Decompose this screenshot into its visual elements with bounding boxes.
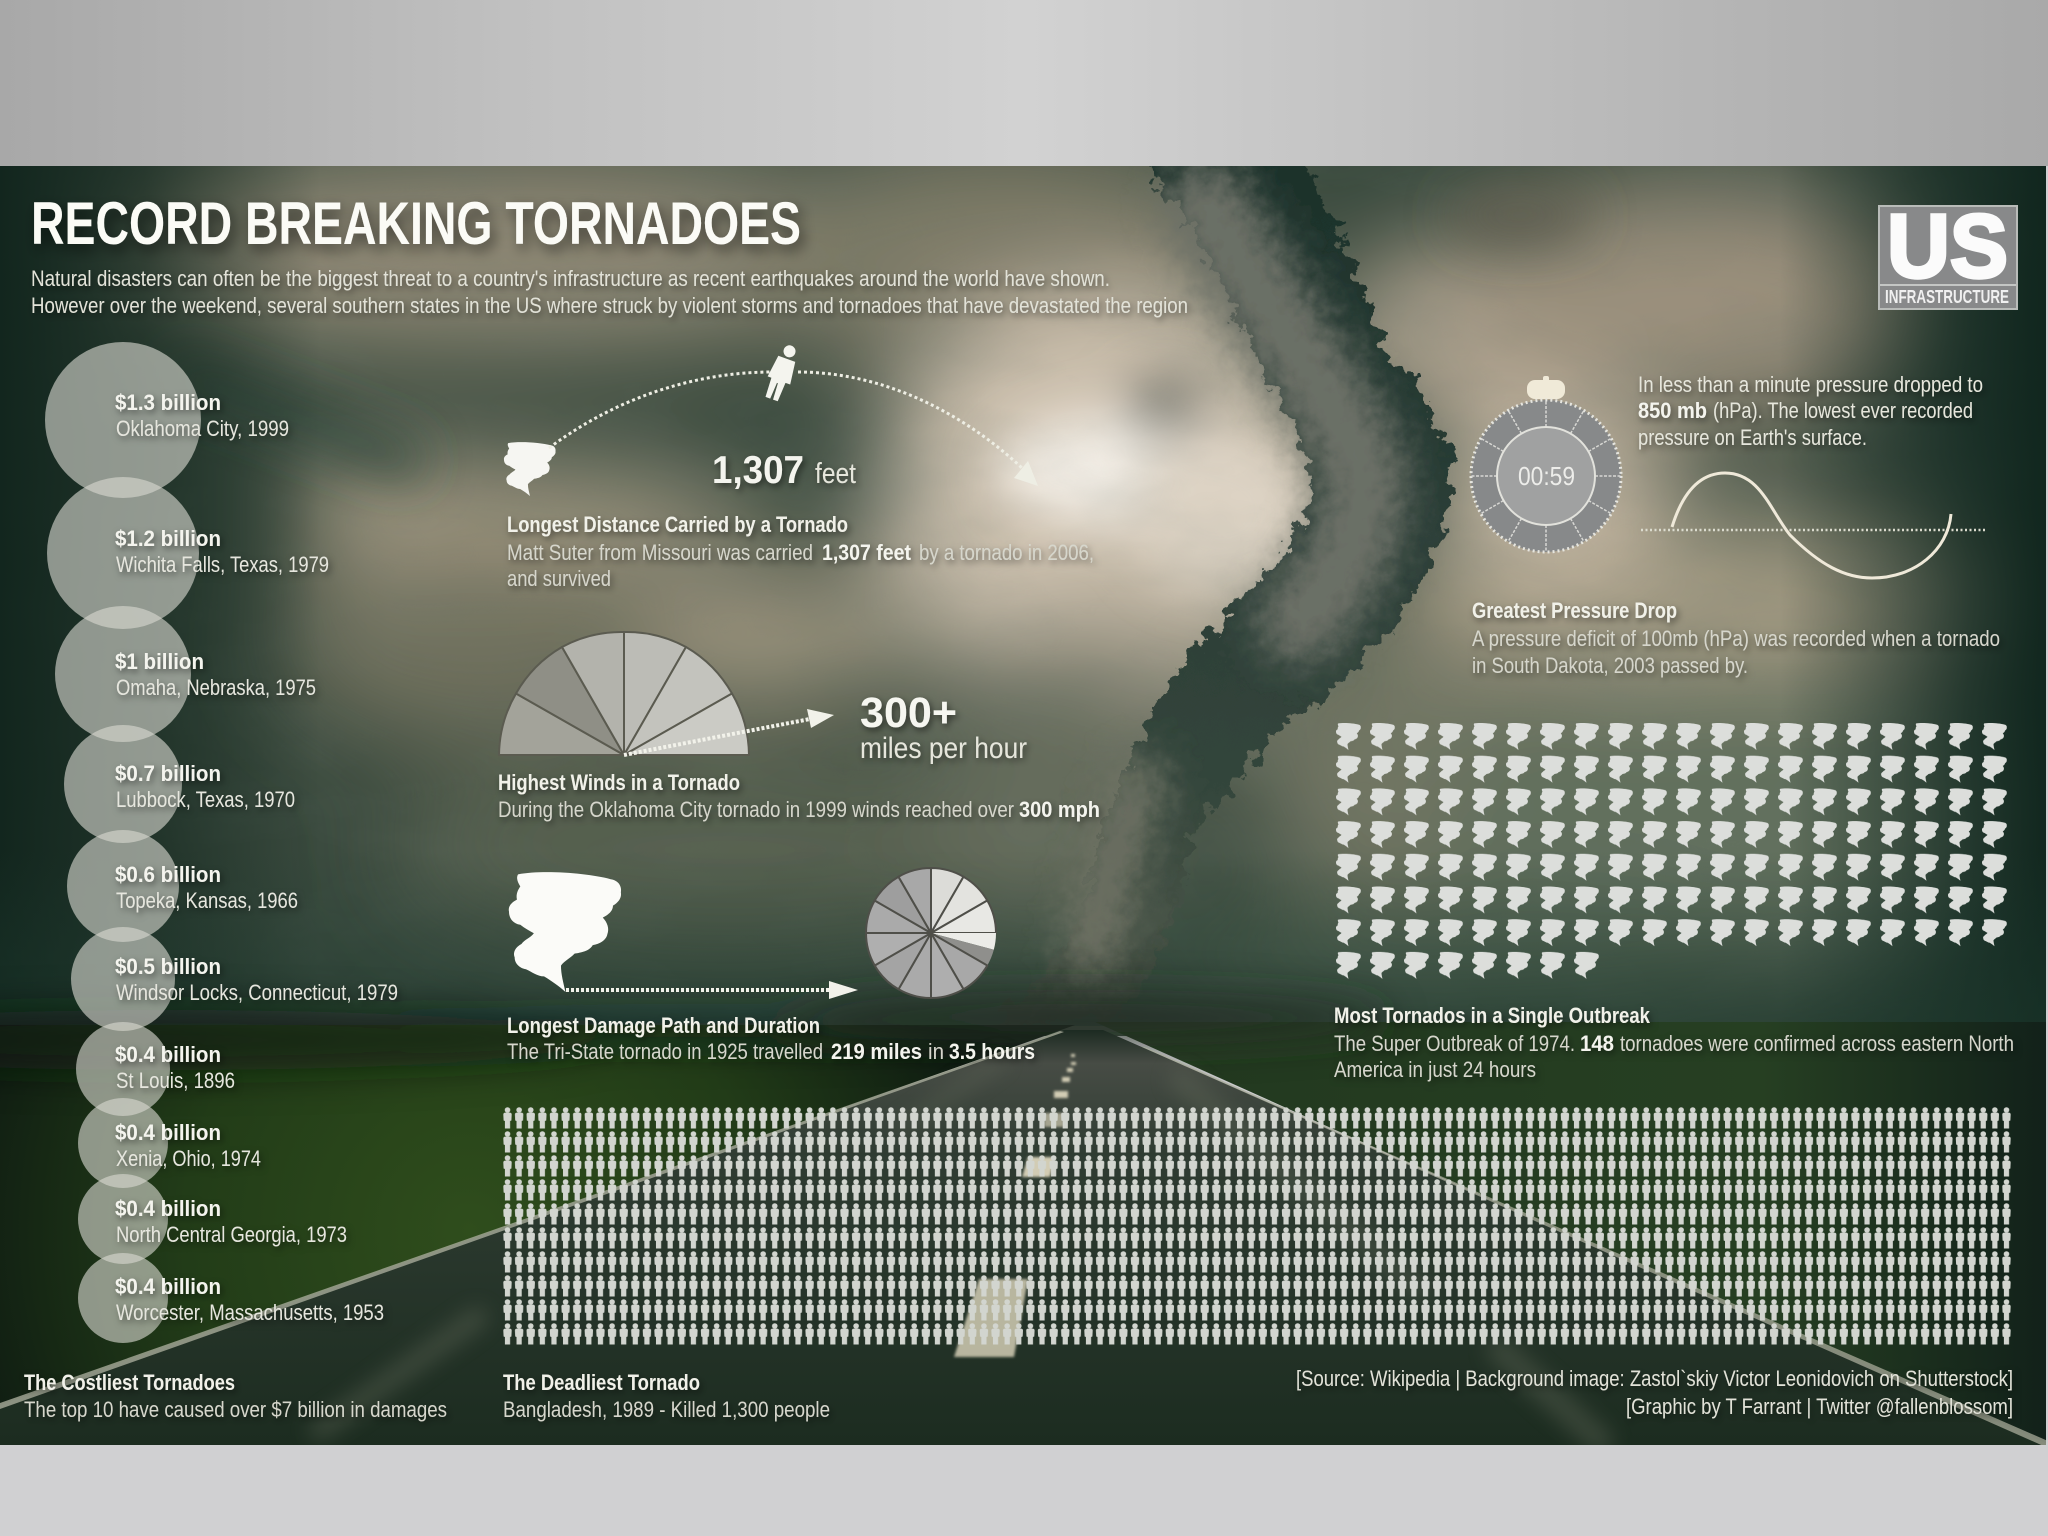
bubble labels: Lubbock, Texas, 1970 (116, 787, 295, 812)
caption: in (928, 1039, 944, 1064)
caption: Most Tornados in a Single Outbreak (1334, 1003, 1651, 1028)
pressure note: In less than a minute pressure dropped to (1638, 372, 1983, 397)
wind speed figure: miles per hour (860, 732, 1027, 765)
caption: in South Dakota, 2003 passed by. (1472, 653, 1748, 678)
intro text (31, 266, 1188, 318)
caption (507, 1013, 1035, 1064)
caption (1334, 1003, 2014, 1082)
caption: The Deadliest Tornado (503, 1370, 700, 1395)
caption (503, 1370, 830, 1422)
bubble column (45, 342, 201, 1343)
tornado count grid (1335, 722, 2015, 984)
caption: by a tornado in 2006, (919, 540, 1094, 565)
costliest tornadoes caption (24, 1370, 447, 1422)
panel: deadliest tornado (502, 1107, 2013, 1422)
distance figure (712, 449, 856, 492)
intro text: Natural disasters can often be the biggest threat to a country's infrastructure as recent earthquakes around the world have shown. (31, 266, 1110, 291)
pressure note: pressure on Earth's surface. (1638, 425, 1867, 450)
bubble labels: St Louis, 1896 (116, 1068, 235, 1093)
caption: Bangladesh, 1989 - Killed 1,300 people (503, 1397, 830, 1422)
stopwatch (1471, 376, 1621, 552)
logo: US Infrastructure: US (1887, 197, 2008, 297)
bubble labels: Windsor Locks, Connecticut, 1979 (116, 980, 398, 1005)
intro text: However over the weekend, several southern states in the US where struck by violent storms and tornadoes that have devastated the region (31, 293, 1188, 318)
bubble labels: Oklahoma City, 1999 (116, 416, 289, 441)
caption (1472, 598, 2000, 678)
stopwatch: 00:59 (1518, 461, 1575, 491)
panel: most tornados in an outbreak (1334, 722, 2015, 1082)
pressure wave chart (1641, 473, 1985, 578)
panel: highest winds (498, 632, 1100, 822)
arrow head (829, 981, 858, 999)
panel: longest distance carried (504, 342, 1094, 591)
bubble labels (115, 390, 398, 1325)
caption: and survived (507, 566, 611, 591)
bubble labels: North Central Georgia, 1973 (116, 1222, 347, 1247)
arrow head (807, 709, 834, 728)
bubble labels: Topeka, Kansas, 1966 (116, 888, 298, 913)
distance figure: 1,307 (712, 449, 804, 492)
dotted arrow (624, 719, 810, 755)
caption: 219 miles (831, 1039, 922, 1064)
icon: small tornado (504, 442, 556, 496)
caption: The Super Outbreak of 1974. (1334, 1031, 1575, 1056)
wind speed figure: 300+ (860, 689, 957, 737)
tornado funnel (1042, 166, 1458, 998)
bubble labels: $0.4 billion (115, 1196, 221, 1221)
panel: longest damage path (507, 868, 1035, 1064)
title: RECORD BREAKING TORNADOES (31, 190, 801, 257)
wind speed figure (860, 689, 1027, 765)
dotted flight arc (549, 372, 1022, 468)
bubble labels: $0.5 billion (115, 954, 221, 979)
pressure note (1638, 372, 1983, 450)
people grid (502, 1107, 2013, 1347)
bubble labels: $0.4 billion (115, 1042, 221, 1067)
source credits (1296, 1366, 2013, 1419)
road wear streaks (320, 1060, 1600, 1441)
road surface (0, 1030, 2048, 1446)
icon: person (761, 342, 803, 403)
costliest tornadoes caption: The Costliest Tornadoes (24, 1370, 235, 1395)
caption: 1,307 feet (822, 540, 912, 565)
caption: Matt Suter from Missouri was carried (507, 540, 813, 565)
caption: Longest Damage Path and Duration (507, 1013, 820, 1038)
caption: The Tri-State tornado in 1925 travelled (507, 1039, 823, 1064)
costliest tornadoes caption: The top 10 have caused over $7 billion in damages (24, 1397, 447, 1422)
bubble labels: Omaha, Nebraska, 1975 (116, 675, 316, 700)
distance figure: feet (815, 458, 856, 490)
caption: Greatest Pressure Drop (1472, 598, 1677, 623)
arrow head (1014, 461, 1038, 486)
caption: 3.5 hours (949, 1039, 1035, 1064)
bubble labels: Worcester, Massachusetts, 1953 (116, 1300, 384, 1325)
road edge line left (0, 1031, 1064, 1409)
caption: 300 mph (1019, 797, 1100, 822)
pressure note: (hPa). The lowest ever recorded (1713, 398, 1973, 423)
panel: costliest tornadoes bubbles (45, 342, 398, 1343)
time pie chart (866, 868, 996, 998)
bubble labels: $1.2 billion (115, 526, 221, 551)
caption: During the Oklahoma City tornado in 1999 winds reached over (498, 797, 1014, 822)
caption: America in just 24 hours (1334, 1057, 1536, 1082)
dotted arrow (566, 988, 830, 992)
caption: Longest Distance Carried by a Tornado (507, 512, 848, 537)
bubble labels: Xenia, Ohio, 1974 (116, 1146, 261, 1171)
bubble labels: $1 billion (115, 649, 204, 674)
pressure note: 850 mb (1638, 398, 1707, 423)
icon: large tornado (509, 872, 621, 992)
grass right of road (1095, 1022, 2048, 1450)
road edge line right (1142, 1047, 2048, 1448)
logo: US Infrastructure: INFRASTRUCTURE (1885, 287, 2009, 307)
bubble labels: $1.3 billion (115, 390, 221, 415)
panel: greatest pressure drop (1471, 372, 2000, 678)
horizon haze (0, 996, 1390, 1070)
semicircle wind gauge (499, 632, 749, 755)
caption: 148 (1580, 1031, 1614, 1056)
caption: Highest Winds in a Tornado (498, 770, 740, 795)
bubble labels: Wichita Falls, Texas, 1979 (116, 552, 329, 577)
bubble labels: $0.4 billion (115, 1120, 221, 1145)
centre dashes (954, 1054, 1076, 1357)
grass left of road (0, 1025, 1075, 1410)
caption (507, 512, 1094, 591)
bubble labels: $0.6 billion (115, 862, 221, 887)
caption (498, 770, 1100, 822)
bubble labels: $0.7 billion (115, 761, 221, 786)
bubble labels: $0.4 billion (115, 1274, 221, 1299)
